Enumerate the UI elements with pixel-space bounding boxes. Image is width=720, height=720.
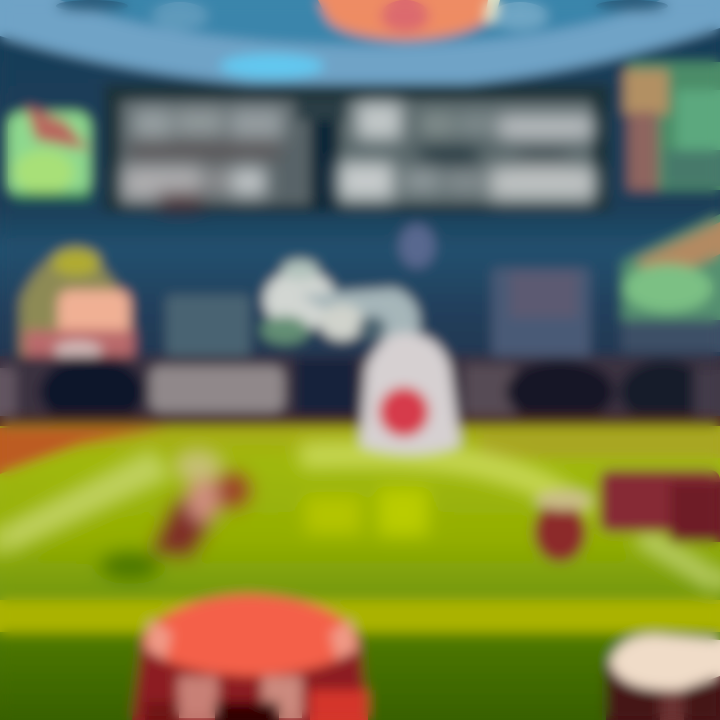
red sideline [0, 428, 170, 474]
large red chip [132, 594, 368, 720]
stadium wall background [0, 0, 720, 440]
far edge yellow [480, 432, 720, 458]
scoreboard frame [104, 84, 610, 212]
lower wall lavender spot [399, 224, 435, 268]
roof emblem: orange oval [318, 0, 500, 40]
right upper panel: striped board [624, 62, 720, 190]
right lower panel: green and orange tile [622, 214, 720, 352]
field numbers [305, 488, 428, 536]
center white splash [261, 260, 419, 345]
center right board: purple slate panel [492, 268, 590, 358]
left field line [0, 450, 172, 556]
center left board: slate panel [166, 295, 250, 363]
lower stands [0, 356, 720, 430]
yellow yard line [0, 600, 720, 632]
center right chip [534, 490, 592, 562]
right field line [640, 535, 720, 584]
stadium roof arc [0, 0, 720, 90]
football pitch [0, 426, 720, 720]
left chip stack [100, 450, 250, 580]
bottom right chip [606, 635, 720, 720]
scoreboard lettering rendered as out-of-focus light blocks [122, 102, 596, 210]
left upper panel: green tile [8, 106, 90, 200]
right chip stack [600, 470, 720, 542]
left lower panel: peach tile [20, 248, 134, 359]
betting bag with red dot [360, 333, 460, 454]
center arc field line [300, 455, 585, 515]
